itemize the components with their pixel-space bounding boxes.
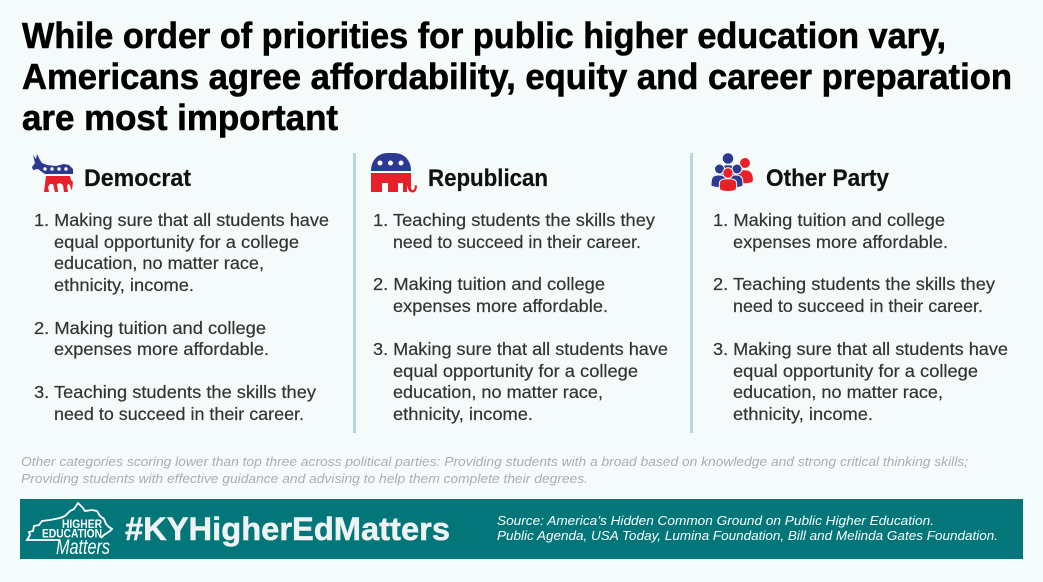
list: Other Party priorities: equal opportunity for a college: [733, 361, 978, 381]
title: [22, 15, 1012, 138]
heading: Democrat: Democrat: [84, 165, 191, 192]
list: Democrat priorities: ethnicity, income.: [54, 275, 194, 295]
footnote: [21, 454, 968, 486]
list: Democrat priorities: 2. Making tuition and college: [34, 318, 266, 338]
heading: Other Party: Other Party: [766, 165, 890, 192]
logo: Higher Education Matters: HIGHER: [62, 519, 103, 531]
list: Democrat priorities: 3. Teaching students the skills they: [34, 382, 316, 402]
list: Democrat priorities: expenses more affordable.: [54, 339, 269, 359]
list: Other Party priorities: [713, 210, 1008, 424]
logo: Higher Education Matters: EDUCATION: [42, 528, 102, 540]
icon: donkey: [32, 154, 73, 192]
logo: Higher Education Matters: Matters: [56, 536, 110, 559]
logo: Higher Education Matters: [27, 503, 112, 559]
list: Other Party priorities: 3. Making sure that all students have: [713, 339, 1008, 359]
panel: Democrat: [32, 154, 329, 424]
icon: elephant: [371, 153, 417, 192]
list: Republican priorities: [373, 210, 668, 424]
source: Source: America’s Hidden Common Ground on Public Higher Education.: [497, 513, 934, 528]
list: Republican priorities: education, no matter race,: [393, 382, 603, 402]
list: Republican priorities: need to succeed in their career.: [393, 232, 641, 252]
icon: group of people: [711, 153, 753, 192]
list: Republican priorities: equal opportunity for a college: [393, 361, 638, 381]
heading: Republican: Republican: [428, 165, 548, 192]
list: Democrat priorities: 1. Making sure that all students have: [34, 210, 329, 230]
footer banner: [20, 499, 1023, 559]
panel: Other Party: [711, 153, 1008, 424]
list: Democrat priorities: equal opportunity for a college: [54, 232, 299, 252]
list: Republican priorities: 3. Making sure that all students have: [373, 339, 668, 359]
list: Other Party priorities: education, no matter race,: [733, 382, 943, 402]
list: Other Party priorities: ethnicity, income.: [733, 404, 873, 424]
list: Democrat priorities: [34, 210, 329, 424]
list: Democrat priorities: need to succeed in their career.: [54, 404, 304, 424]
source: Public Agenda, USA Today, Lumina Foundation, Bill and Melinda Gates Foundation.: [497, 528, 998, 543]
title: While order of priorities for public higher education vary,: [22, 15, 946, 56]
list: Other Party priorities: 1. Making tuition and college: [713, 210, 945, 230]
title: are most important: [22, 97, 338, 138]
footnote: Other categories scoring lower than top three across political parties: Providing students with a broad based on knowledge and strong critical thinking skills;: [21, 454, 968, 469]
source: [497, 513, 998, 543]
list: Republican priorities: 2. Making tuition and college: [373, 274, 605, 294]
list: Republican priorities: 1. Teaching students the skills they: [373, 210, 655, 230]
list: Democrat priorities: education, no matter race,: [54, 253, 264, 273]
list: Republican priorities: ethnicity, income.: [393, 404, 533, 424]
title: Americans agree affordability, equity and career preparation: [22, 56, 1012, 97]
footnote: Providing students with effective guidance and advising to help them complete their degrees.: [21, 471, 588, 486]
list: Other Party priorities: 2. Teaching students the skills they: [713, 274, 995, 294]
hashtag: #KYHigherEdMatters: [125, 511, 450, 547]
list: Other Party priorities: need to succeed in their career.: [733, 296, 983, 316]
list: Other Party priorities: expenses more affordable.: [733, 232, 948, 252]
list: Republican priorities: expenses more affordable.: [393, 296, 608, 316]
panel: Republican: [371, 153, 668, 424]
